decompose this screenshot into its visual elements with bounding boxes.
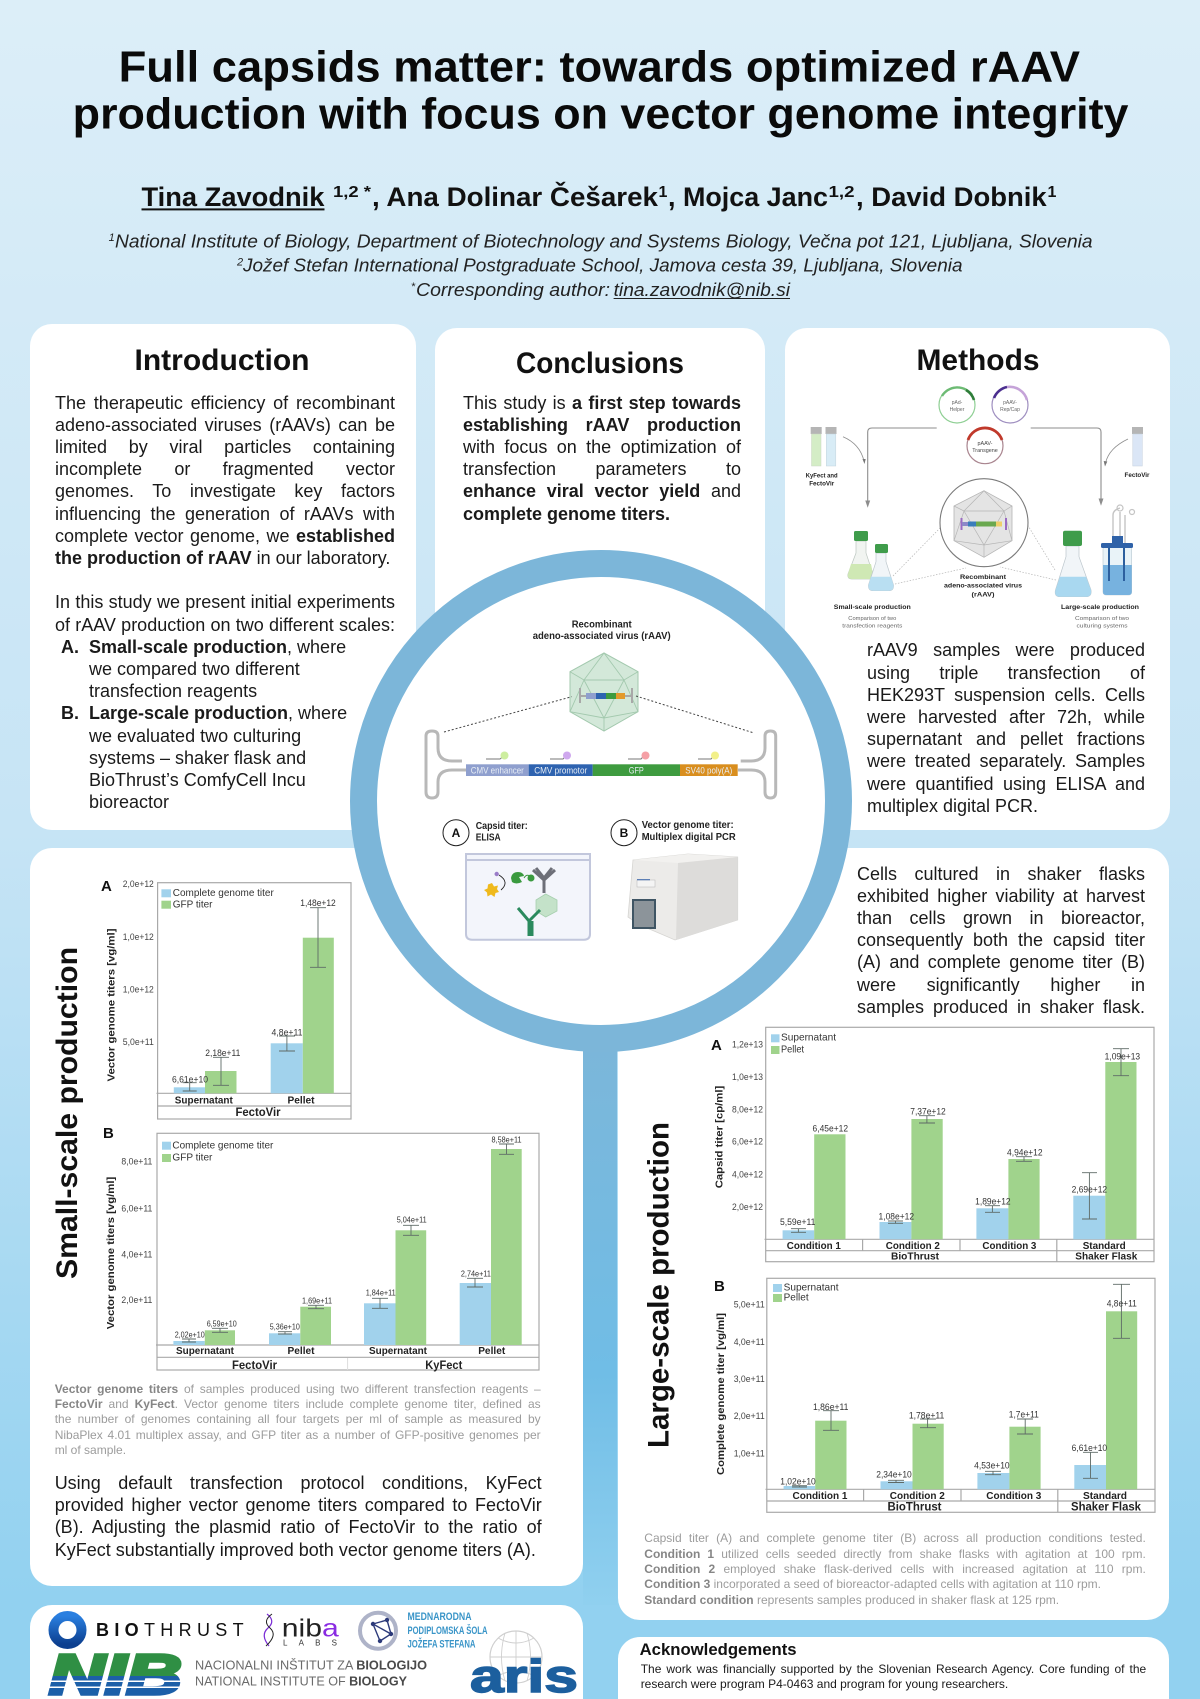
text block: conclusions: transfection parameters to	[463, 459, 741, 479]
label: recombinant AAV: Recombinant	[572, 619, 632, 631]
affiliations: Jožef Stefan International Postgraduate School, Jamova cesta 39, Ljubljana, Slovenia	[242, 256, 962, 276]
text block: introduction paragraph: incomplete or fragmented vector	[55, 459, 395, 479]
heading: methods: Methods	[916, 344, 1040, 377]
authors: , Ana Dolinar Češarek	[372, 181, 659, 212]
panel: methods	[785, 328, 1170, 830]
caption: vector genome titers: FectoVir and KyFect. Vector genome titers include complete genome titer, defined as	[55, 1397, 541, 1411]
label: large-scale production	[1061, 604, 1139, 630]
affiliations: tina.zavodnik@nib.si	[614, 280, 791, 300]
logo: Niba Labs	[264, 1614, 339, 1648]
affiliations: 1	[109, 232, 115, 244]
value labels: 1,7e+11	[1009, 1410, 1039, 1421]
affiliations: National Institute of Biology, Department of Biotechnology and Systems Biology, Večna pot 121, Ljubljana, Slovenia	[115, 231, 1093, 251]
text block: introduction paragraph: A.	[61, 637, 79, 657]
error bars	[791, 1049, 1129, 1232]
icon: reagent tubes KyFect and FectoVir: FectoVir	[809, 481, 835, 488]
bar chart B: complete genome titer: B	[714, 1278, 725, 1295]
icon: small-scale flasks	[848, 531, 894, 591]
y axis ticks: 2,0e+12	[123, 879, 154, 890]
value labels: 6,61e+10	[1072, 1443, 1107, 1454]
value labels: 6,45e+12	[813, 1124, 848, 1135]
text block: conclusions	[463, 393, 742, 524]
ring	[364, 564, 838, 1038]
icon: plasmid pAAV-Rep/Cap: Rep/Cap	[1000, 407, 1020, 413]
segment: GFP: GFP	[629, 766, 644, 776]
label: large-scale production: Comparison of two	[1075, 616, 1129, 622]
caption: vector genome titers: the number of genomes containing all four targets per ml of sample as measured by	[55, 1412, 541, 1426]
text block: acknowledgements: The work was financially supported by the Slovenian Research Agency. Core funding of the	[641, 1662, 1146, 1676]
legend	[161, 887, 274, 910]
legend: GFP titer	[173, 898, 213, 910]
y axis ticks	[121, 1156, 152, 1306]
value labels: 1,48e+12	[300, 898, 336, 909]
text block: introduction paragraph: the production of rAAV in our laboratory.	[55, 548, 390, 568]
logo: BioThrust: BIO THRUST	[96, 1620, 244, 1640]
text block: methods: HEK293T suspension cells. Cells	[867, 685, 1145, 705]
text block: introduction paragraph: B.	[61, 703, 79, 723]
bar chart B: FectoVir and KyFect: Vector genome titers [vg/ml]	[105, 1177, 117, 1329]
category labels: Standard	[1083, 1240, 1126, 1252]
category labels: Supernatant	[369, 1345, 427, 1357]
left ITR hairpin	[426, 731, 466, 798]
category labels: Condition 2	[890, 1490, 945, 1502]
label: large-scale production: culturing systems	[1076, 624, 1128, 630]
value labels: 7,37e+12	[910, 1106, 946, 1117]
bars	[783, 1062, 1136, 1239]
label: B vector genome titer: Multiplex digital PCR	[642, 831, 736, 843]
legend: Complete genome titer	[173, 887, 274, 899]
logo: Jožef Stefan International Postgraduate School: JOŽEFA STEFANA	[408, 1638, 476, 1651]
label: small-scale production: Comparison of two	[848, 616, 896, 622]
value labels: 1,08e+12	[879, 1211, 914, 1222]
category labels: Condition 3	[982, 1240, 1037, 1252]
label: recombinant AAV: (rAAV)	[972, 592, 994, 599]
y axis ticks	[734, 1300, 765, 1460]
text block: methods: using triple transfection of	[867, 663, 1145, 683]
text block: introduction paragraph: influencing the generation of rAAVs with	[55, 504, 395, 524]
bar chart B: FectoVir and KyFect	[103, 1125, 539, 1372]
text block: introduction paragraph: In this study we present initial experiments	[55, 592, 395, 612]
label: B vector genome titer: B	[620, 826, 629, 840]
value labels: 2,69e+12	[1072, 1184, 1107, 1195]
label: A capsid titer: Capsid titer:	[476, 820, 528, 832]
category labels: Supernatant	[175, 1094, 233, 1106]
logo: ARIS	[470, 1631, 578, 1699]
value labels: 4,8e+11	[1107, 1299, 1137, 1310]
text block: introduction paragraph: Small-scale production, where	[89, 637, 346, 657]
dotted zoom lines	[444, 696, 754, 733]
probes	[486, 752, 719, 760]
y axis ticks: 2,0e+11	[121, 1295, 152, 1306]
text block: introduction paragraph: we compared two different	[89, 659, 300, 679]
category labels: Pellet	[478, 1345, 506, 1357]
authors: 1	[658, 184, 668, 201]
logo: Niba Labs: nib a	[282, 1615, 339, 1643]
text block: conclusions: complete genome titers.	[463, 504, 670, 524]
text block: large-scale findings: (A) and complete genome titer (B)	[857, 952, 1145, 972]
value labels: 6,61e+10	[172, 1075, 208, 1086]
category labels: Condition 2	[886, 1240, 940, 1252]
y axis ticks: 1,0e+12	[123, 984, 154, 996]
legend: Pellet	[784, 1292, 809, 1304]
panel: logos	[30, 1605, 583, 1699]
value labels: 4,53e+10	[974, 1460, 1010, 1471]
y axis ticks: 3,0e+11	[734, 1374, 765, 1385]
logo: National Institute of Biology: NACIONALNI INŠTITUT ZA BIOLOGIJO	[195, 1657, 427, 1672]
segment: SV40 polyA: SV40 poly(A)	[685, 766, 732, 776]
dotted connector lines	[893, 524, 1056, 584]
panel: introduction	[30, 324, 416, 830]
title: production with focus on vector genome integrity	[73, 89, 1129, 138]
y axis ticks	[732, 1040, 763, 1213]
caption: vector genome titers: Vector genome titers of samples produced using two different transfection reagents –	[55, 1382, 541, 1396]
error bars	[182, 1144, 514, 1342]
value labels: 1,84e+11	[366, 1288, 396, 1298]
text block: introduction paragraph: of rAAV production on two different scales:	[55, 615, 395, 635]
y axis ticks: 5,0e+11	[123, 1037, 154, 1048]
heading: large-scale production: Large-scale production	[642, 1122, 676, 1448]
label: A capsid titer: A	[452, 826, 461, 840]
category labels: FectoVir	[236, 1107, 281, 1119]
value labels: 1,09e+13	[1105, 1052, 1140, 1063]
value labels: 5,36e+10	[270, 1321, 300, 1331]
category labels: Condition 1	[787, 1240, 841, 1252]
text block: small-scale findings: KyFect substantially improved both vector genome titers (A).	[55, 1540, 536, 1560]
bar chart A: capsid titer: Capsid titer [cp/ml]	[714, 1086, 726, 1188]
logo: National Institute of Biology	[49, 1643, 427, 1699]
icon: plasmid pAd-Helper	[939, 387, 975, 423]
category labels	[176, 1345, 506, 1372]
logo: Jožef Stefan International Postgraduate School	[360, 1611, 488, 1651]
value labels	[175, 1134, 522, 1339]
legend: Supernatant	[784, 1282, 839, 1294]
text block: methods	[867, 640, 1146, 816]
bar chart B: FectoVir and KyFect: B	[103, 1125, 114, 1142]
value labels: 6,59e+10	[207, 1319, 237, 1329]
value labels: 2,18e+11	[205, 1048, 240, 1059]
text block: methods: rAAV9 samples were produced	[867, 640, 1145, 660]
value labels: 1,89e+12	[975, 1196, 1011, 1207]
value labels: 5,04e+11	[397, 1215, 427, 1225]
central circle: assay overview	[350, 550, 852, 1052]
label: small-scale production: Small-scale production	[834, 604, 911, 611]
text block: introduction paragraph: complete vector genome, we established	[55, 526, 395, 546]
bars	[784, 1311, 1137, 1489]
y axis ticks: 4,0e+11	[121, 1250, 152, 1260]
legend	[771, 1032, 836, 1055]
bar chart A: FectoVir	[101, 878, 351, 1119]
legend: Supernatant	[781, 1032, 836, 1044]
title: Full capsids matter: towards optimized rAAV	[119, 43, 1081, 92]
icon: plasmid pAAV-Transgene: Transgene	[972, 448, 998, 454]
logo: BioThrust	[54, 1616, 244, 1644]
y axis ticks: 8,0e+11	[121, 1156, 152, 1168]
y axis ticks: 4,0e+12	[732, 1170, 763, 1180]
label: B vector genome titer: Vector genome titer:	[642, 819, 734, 831]
icon: large-scale shaker flask	[1055, 531, 1091, 597]
text block: conclusions: establishing rAAV production	[463, 415, 741, 435]
icon: bioreactor	[1101, 505, 1134, 595]
icon: plasmid pAd-Helper: Helper	[950, 407, 965, 413]
category labels: Standard	[1083, 1490, 1127, 1502]
icon: plasmid pAAV-Rep/Cap: pAAV-	[1003, 400, 1017, 406]
bar chart A: FectoVir: A	[101, 878, 112, 895]
authors: 1	[1048, 184, 1056, 201]
label: large-scale production: Large-scale production	[1061, 604, 1139, 611]
heading: conclusions: Conclusions	[516, 347, 684, 380]
value labels: 1,69e+11	[302, 1295, 332, 1305]
methods workflow diagram	[806, 387, 1150, 630]
authors: 1,2 *	[333, 184, 372, 201]
text block: methods: were quantified using ELISA and	[867, 774, 1145, 794]
legend	[162, 1139, 274, 1164]
authors: 1,2	[828, 184, 855, 201]
text block: small-scale findings: (B). Adjusting the plasmid ratio of FectoVir to the ratio of	[55, 1517, 542, 1537]
y axis ticks: 4,0e+11	[734, 1337, 765, 1348]
text block: large-scale findings: were significantly higher in	[857, 975, 1145, 995]
y axis ticks: 1,0e+13	[732, 1072, 763, 1083]
panel: conclusions	[435, 328, 765, 700]
arrow: plasmids to small-scale production	[866, 428, 937, 506]
category labels: FectoVir	[232, 1360, 278, 1372]
value labels	[780, 1052, 1140, 1228]
text block: introduction paragraph: systems – shaker flask and	[89, 748, 306, 768]
value labels: 4,94e+12	[1007, 1148, 1043, 1159]
icon: plasmid pAAV-Transgene	[967, 428, 1003, 464]
value labels: 4,8e+11	[272, 1027, 302, 1038]
logo: National Institute of Biology: NATIONAL INSTITUTE OF BIOLOGY	[195, 1674, 407, 1689]
caption: production conditions	[644, 1531, 1146, 1607]
text block: introduction paragraph: transfection reagents	[89, 681, 257, 701]
icon: plasmid pAd-Helper: pAd-	[952, 400, 963, 406]
text block: conclusions: This study is a first step towards	[463, 393, 741, 413]
category labels: BioThrust	[891, 1251, 939, 1263]
text block: methods: were treated separately. Samples	[867, 751, 1145, 771]
bar chart A: capsid titer	[711, 1027, 1154, 1263]
icon: reagent tubes KyFect and FectoVir	[806, 427, 866, 488]
icon: digital PCR instrument	[628, 854, 738, 940]
bar chart B: complete genome titer: Complete genome titer [vg/ml]	[715, 1313, 727, 1475]
text block: introduction paragraph: we evaluated two culturing	[89, 726, 301, 746]
category labels: Pellet	[288, 1345, 315, 1357]
label: recombinant AAV: adeno-associated virus	[944, 583, 1022, 590]
value labels	[172, 898, 336, 1086]
legend: Pellet	[781, 1043, 804, 1055]
label: small-scale production: transfection reagents	[842, 624, 903, 630]
category labels: Pellet	[288, 1094, 315, 1106]
label: A capsid titer: ELISA	[476, 832, 501, 844]
y axis ticks: 2,0e+11	[734, 1411, 765, 1422]
affiliations: Corresponding author:	[416, 280, 610, 300]
caption: production conditions: Standard condition represents samples produced in shaker flask at 125 rpm.	[644, 1593, 1059, 1607]
title	[73, 43, 1129, 138]
y axis ticks: 6,0e+11	[121, 1204, 152, 1214]
label: recombinant AAV	[944, 574, 1022, 599]
category labels: Supernatant	[176, 1345, 234, 1357]
label: A capsid titer	[443, 820, 528, 846]
icon: reagent tube FectoVir	[1104, 427, 1150, 479]
caption: vector genome titers: NibaPlex 4.01 multiplex assay, and GFP titer as a number of GFP-positive genomes per	[55, 1428, 541, 1442]
label: recombinant AAV: adeno-associated virus (rAAV)	[533, 630, 671, 642]
value labels: 8,58e+11	[492, 1134, 522, 1144]
caption: production conditions: Condition 1 utilized cells seeded directly from shake flasks with agitation at 100 rpm.	[644, 1547, 1146, 1561]
panel: small-scale production	[30, 848, 583, 1586]
panel: acknowledgements	[618, 1637, 1169, 1699]
text block: introduction paragraph: Large-scale production, where	[89, 703, 347, 723]
logo: Niba Labs: LABS	[283, 1638, 337, 1648]
bars	[173, 1149, 522, 1345]
text block: conclusions: with focus on the optimization of	[463, 437, 741, 457]
legend: GFP titer	[172, 1152, 213, 1164]
caption: production conditions: Condition 3 incorporated a seed of bioreactor-adapted cells with agitation at 110 rpm.	[644, 1577, 1101, 1591]
logo: Jožef Stefan International Postgraduate School: MEDNARODNA	[408, 1611, 472, 1623]
value labels: 5,59e+11	[780, 1217, 815, 1228]
affiliations: *	[411, 281, 416, 293]
label: small-scale production	[834, 604, 911, 630]
error bars	[792, 1284, 1130, 1487]
arrow: plasmids to large-scale production	[1031, 428, 1103, 504]
value labels: 1,02e+10	[780, 1476, 816, 1487]
vector genome construct	[426, 731, 776, 798]
label: B vector genome titer	[611, 819, 736, 846]
caption: vector genome titers: ml of sample.	[55, 1443, 126, 1457]
text block: large-scale findings: samples produced in shaker flask.	[857, 997, 1145, 1017]
heading: small-scale production: Small-scale production	[51, 947, 84, 1279]
authors: Tina Zavodnik	[142, 182, 325, 212]
bars	[174, 938, 334, 1093]
text block: introduction paragraph: limited by viral particles containing	[55, 437, 395, 457]
icon: reagent tubes KyFect and FectoVir: KyFect and	[806, 473, 838, 480]
icon: plasmid pAAV-Transgene: pAAV-	[978, 441, 993, 447]
text block: large-scale findings	[857, 864, 1145, 1017]
text block: introduction paragraph: BioThrust’s ComfyCell Incu	[89, 770, 306, 790]
value labels: 2,74e+11	[461, 1269, 491, 1279]
icon: reagent tube FectoVir: FectoVir	[1124, 472, 1150, 479]
text block: methods: multiplex digital PCR.	[867, 796, 1038, 816]
right ITR hairpin	[738, 731, 776, 798]
authors	[142, 181, 1056, 212]
text block: methods: supernatant and pellet fractions	[867, 729, 1145, 749]
legend: Complete genome titer	[172, 1139, 274, 1151]
y axis ticks: 6,0e+12	[732, 1136, 763, 1148]
icon: ELISA well	[465, 854, 591, 941]
y axis ticks	[123, 879, 154, 1048]
category labels: Condition 1	[792, 1490, 848, 1502]
label: recombinant AAV	[533, 619, 671, 642]
caption: production conditions: Condition 2 employed shake flask-derived cells with increased agitation at 110 rpm.	[644, 1562, 1146, 1576]
y axis ticks: 1,0e+11	[734, 1448, 765, 1460]
icon: rAAV capsid	[940, 479, 1028, 567]
text block: introduction paragraph: genomes. To investigate key factors	[55, 481, 395, 501]
category labels	[175, 1094, 315, 1119]
category labels: Shaker Flask	[1071, 1502, 1142, 1514]
bar chart B: complete genome titer	[714, 1278, 1155, 1514]
value labels: 1,78e+11	[909, 1410, 944, 1421]
logo: Jožef Stefan International Postgraduate School: PODIPLOMSKA ŠOLA	[408, 1624, 488, 1637]
segment: CMV promotor: CMV promotor	[534, 766, 587, 776]
text block: large-scale findings: than cells grown in bioreactor,	[857, 908, 1145, 928]
affiliations	[109, 231, 1093, 300]
segment: CMV enhancer: CMV enhancer	[471, 766, 524, 776]
panel: large-scale production	[618, 848, 1169, 1620]
category labels: Shaker Flask	[1075, 1251, 1137, 1263]
value labels	[780, 1299, 1137, 1487]
icon: green capsid with genome	[570, 653, 638, 731]
value labels: 1,86e+11	[813, 1402, 848, 1413]
text block: conclusions: enhance viral vector yield and	[463, 481, 741, 501]
y axis ticks: 5,0e+11	[734, 1300, 765, 1310]
heading: acknowledgements: Acknowledgements	[640, 1640, 797, 1659]
error bars	[183, 908, 326, 1091]
authors: , Mojca Janc	[668, 182, 828, 212]
authors: , David Dobnik	[856, 182, 1048, 212]
value labels: 2,02e+10	[175, 1329, 205, 1339]
text block: acknowledgements: research were program P4-0463 and program for young researchers.	[641, 1677, 1008, 1691]
category labels: BioThrust	[888, 1502, 942, 1514]
text block: introduction paragraph: The therapeutic efficiency of recombinant	[55, 393, 395, 413]
text block: large-scale findings: Cells cultured in shaker flasks	[857, 864, 1145, 884]
text block: small-scale findings: provided higher vector genome titers compared to FectoVir	[55, 1495, 542, 1515]
label: recombinant AAV: Recombinant	[960, 574, 1007, 581]
caption: production conditions: Capsid titer (A) and complete genome titer (B) across all production conditions tested.	[644, 1531, 1146, 1545]
legend	[773, 1282, 839, 1304]
icon: plasmid pAAV-Rep/Cap	[992, 387, 1028, 423]
text block: acknowledgements	[641, 1662, 1146, 1691]
text block: methods: were harvested after 72h, while	[867, 707, 1145, 727]
y axis ticks: 8,0e+12	[732, 1104, 763, 1116]
text block: large-scale findings: consequently both the capsid titer	[857, 930, 1145, 950]
category labels: Condition 3	[986, 1490, 1041, 1502]
affiliations: 2	[236, 256, 243, 268]
header: title, authors and affiliations	[73, 43, 1129, 300]
segment: GFP	[593, 764, 680, 776]
y axis ticks: 2,0e+12	[732, 1202, 763, 1213]
heading: introduction: Introduction	[134, 344, 310, 377]
category labels: KyFect	[425, 1360, 462, 1372]
y axis ticks: 1,0e+12	[123, 932, 154, 943]
bar chart A: FectoVir: Vector genome titers [vg/ml]	[106, 928, 118, 1082]
value labels: 2,34e+10	[876, 1470, 912, 1481]
caption: vector genome titers	[54, 1382, 541, 1457]
text block: introduction paragraph	[55, 393, 395, 812]
y axis ticks: 1,2e+13	[732, 1040, 763, 1050]
category labels	[792, 1490, 1142, 1514]
text block: introduction paragraph: bioreactor	[89, 792, 169, 812]
text block: introduction paragraph: adeno-associated viruses (rAAVs) can be	[55, 415, 395, 435]
text block: small-scale findings: Using default transfection protocol conditions, KyFect	[55, 1473, 542, 1493]
category labels	[787, 1240, 1137, 1263]
bar chart A: capsid titer: A	[711, 1037, 722, 1054]
text block: large-scale findings: exhibited higher viability at harvest	[857, 886, 1145, 906]
text block: small-scale findings	[55, 1473, 542, 1560]
